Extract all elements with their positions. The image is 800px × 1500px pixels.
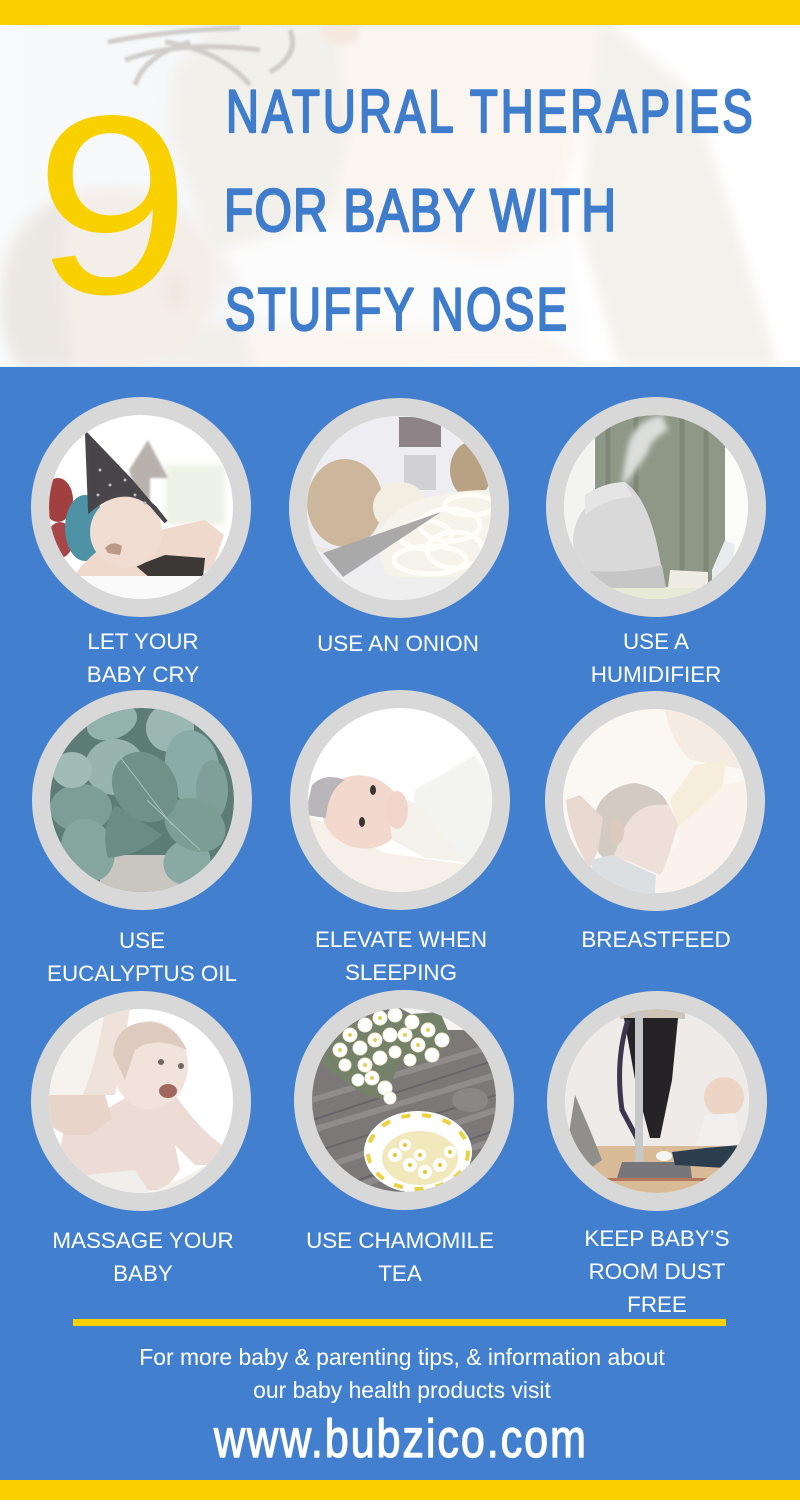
header photo: mother and baby, faded [0,15,800,372]
item: dust free [547,991,767,1211]
label: ELEVATE WHEN [315,927,487,952]
label: USE A [623,629,689,654]
big number 9: 9 [34,63,190,348]
item: breastfeed [545,691,765,911]
title: STUFFY NOSE [225,277,567,344]
title: FOR BABY WITH [224,177,616,244]
item: humidifier [546,397,766,617]
blue panel [0,367,800,1480]
label: BREASTFEED [581,927,731,952]
label: FREE [627,1292,687,1317]
label: USE CHAMOMILE [306,1228,494,1253]
label: TEA [378,1261,422,1286]
label: KEEP BABY’S [584,1226,730,1251]
label: USE AN ONION [317,631,479,656]
divider line [73,1319,726,1326]
item: massage [31,991,251,1211]
item: let your baby cry [31,397,251,617]
label: ROOM DUST [589,1259,726,1284]
label: BABY [113,1261,173,1286]
footer text: our baby health products visit [253,1377,552,1403]
item: chamomile [294,990,514,1210]
item: use an onion [289,398,509,618]
label: HUMIDIFIER [591,662,721,687]
item: eucalyptus [32,690,252,910]
top yellow bar [0,0,800,25]
label: LET YOUR [87,629,199,654]
title: NATURAL THERAPIES [226,79,753,146]
label: MASSAGE YOUR [52,1228,234,1253]
label: SLEEPING [345,960,457,985]
website url: www.bubzico.com [213,1410,586,1469]
title [224,79,753,344]
label: USE [119,928,165,953]
label: EUCALYPTUS OIL [47,961,237,986]
label: BABY CRY [87,662,199,687]
bottom yellow bar [0,1480,800,1500]
item: elevate [290,690,510,910]
footer text: For more baby & parenting tips, & information about [139,1344,665,1370]
